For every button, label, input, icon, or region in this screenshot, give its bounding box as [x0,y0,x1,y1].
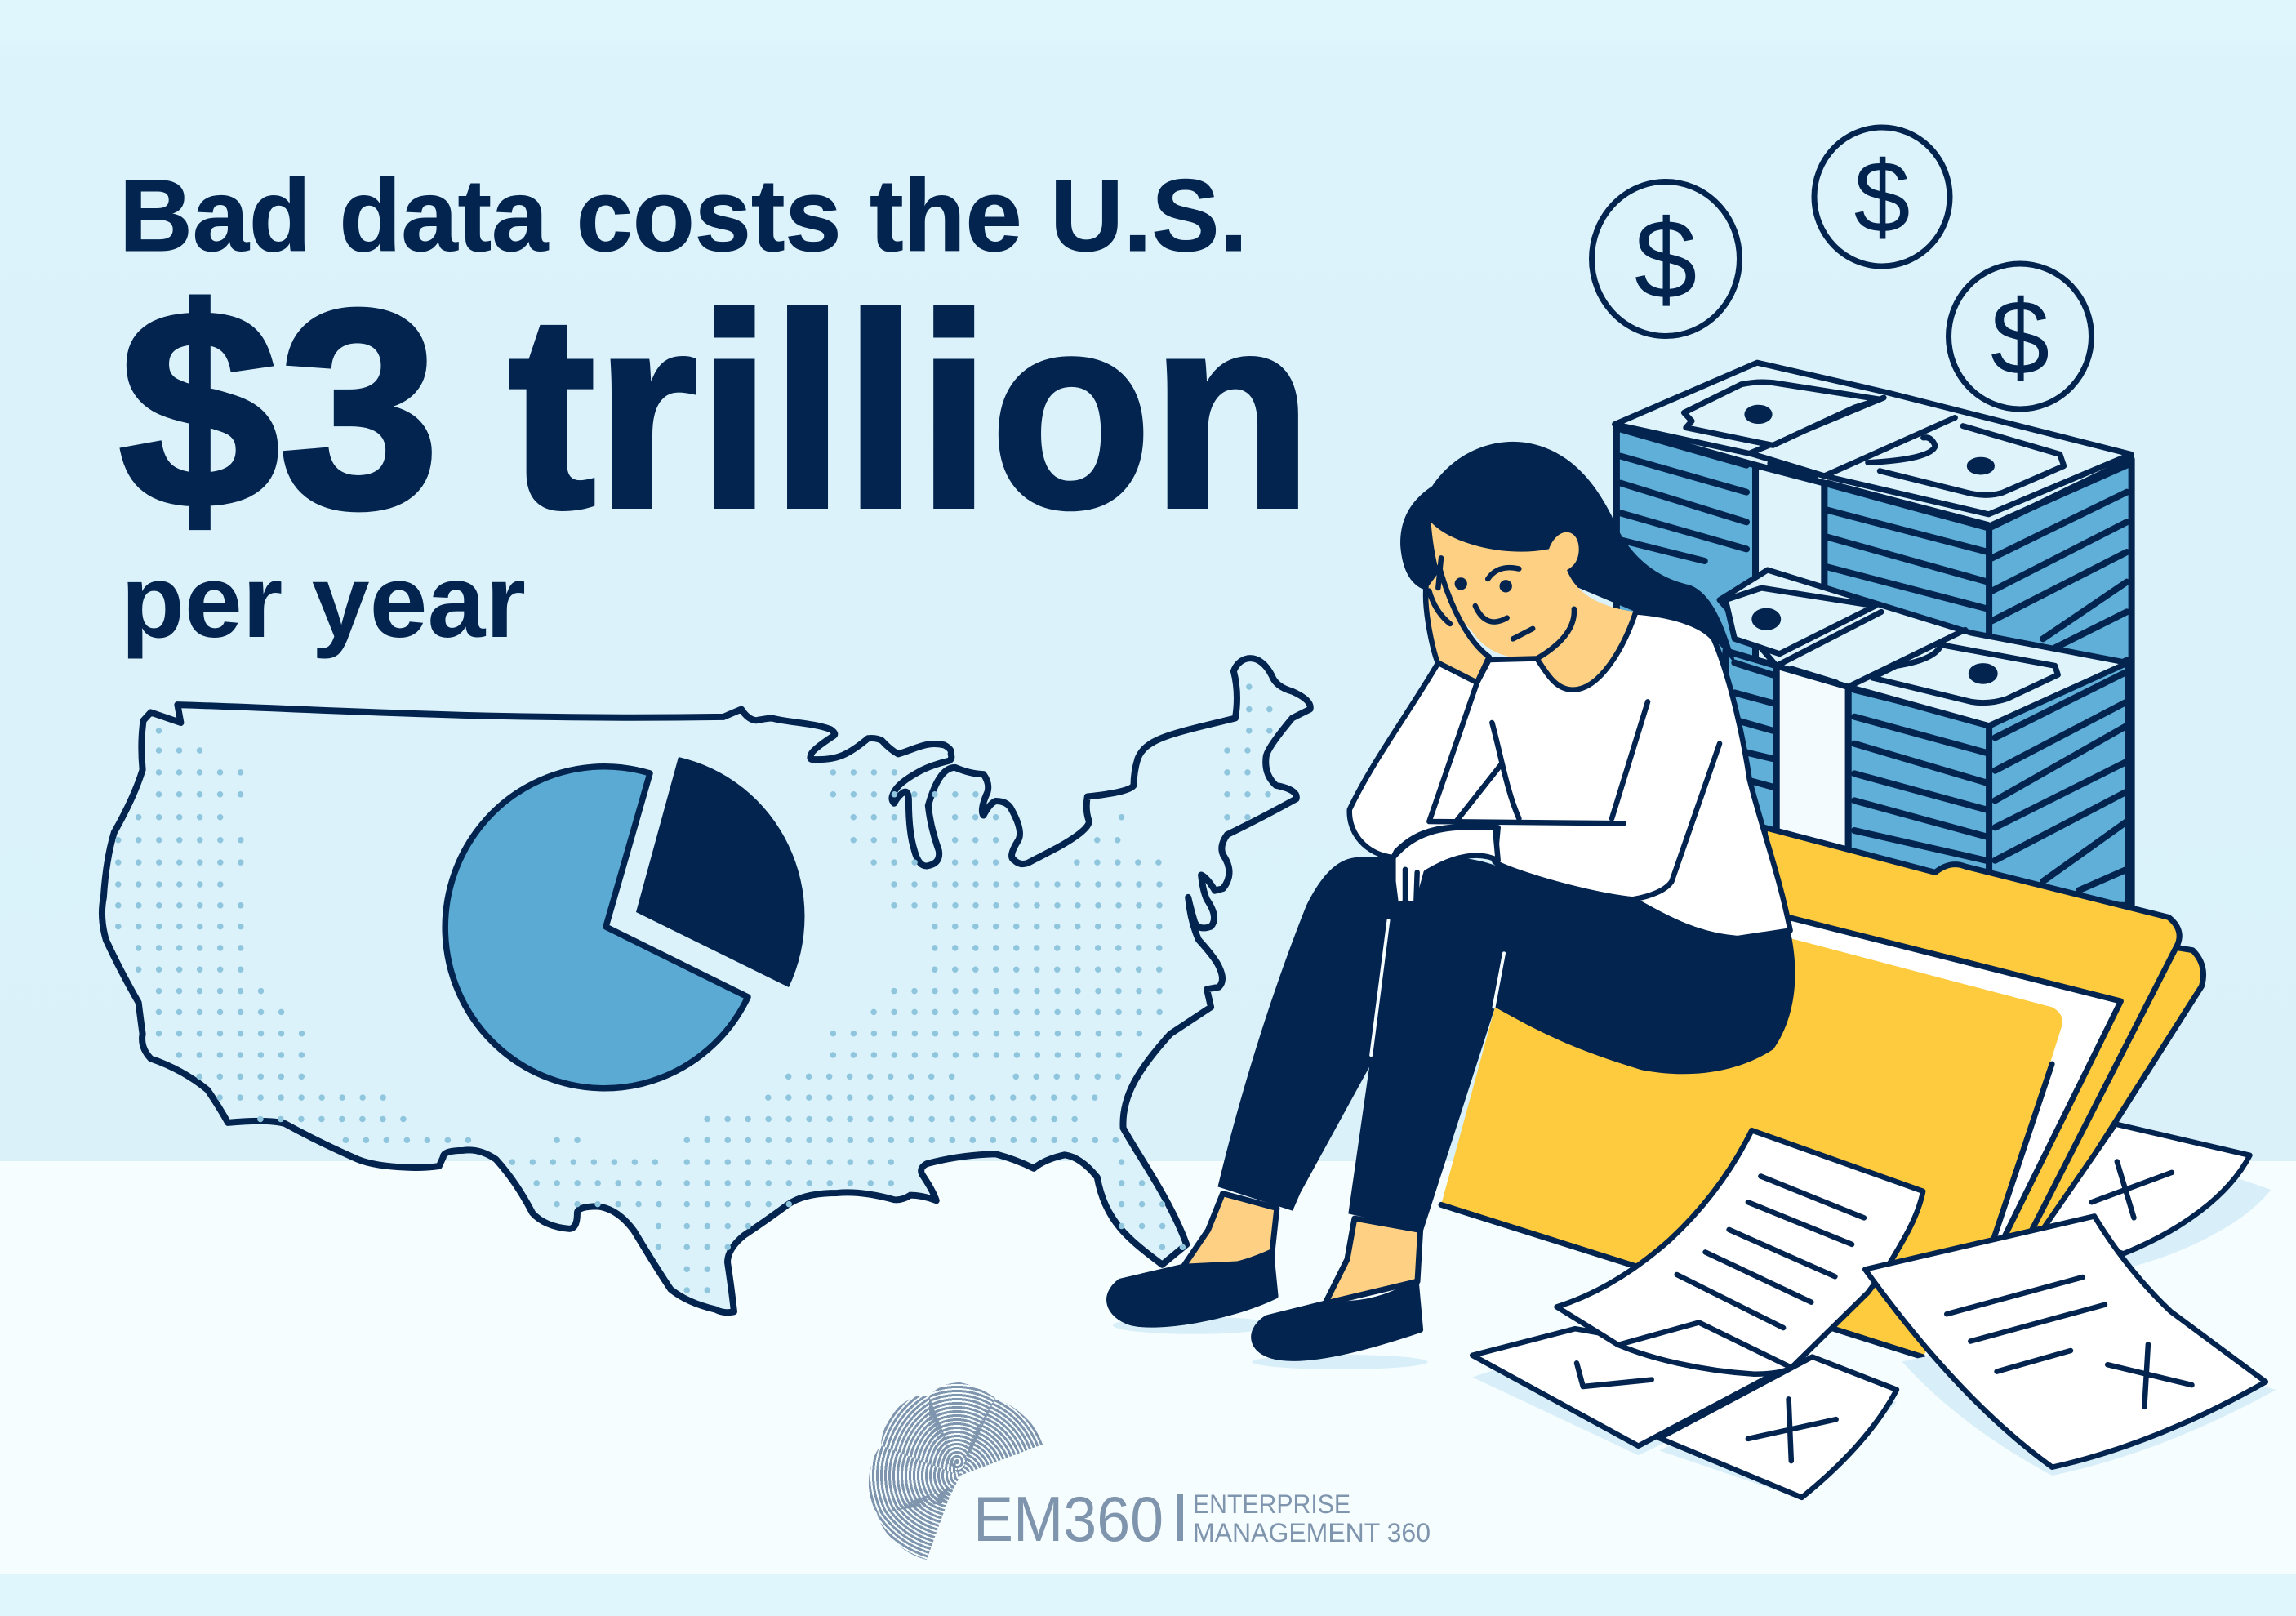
paper shadows [1472,1137,2276,1499]
shirt [1350,612,1791,938]
pie slice: dark blue share [636,757,804,987]
yellow folder [1441,827,2204,1357]
paper with X, back right [2045,1124,2249,1253]
trouser highlights [1371,920,1504,1055]
trousers [1217,856,1795,1231]
pie chart [445,757,804,1088]
coin 2: $ [1854,141,1910,254]
large paper with text lines and X [1865,1216,2266,1467]
folder edges [1441,1064,2052,1357]
mouth [1513,629,1533,639]
upper stack side faces [1617,426,1755,719]
logo wordmark [973,1483,1431,1555]
lower stack side faces [1725,651,1777,839]
background wall [0,0,2296,1161]
headline figure: trillion: trillion [508,259,1312,565]
title [119,159,1312,659]
lower cash stack [1720,570,2128,906]
EM360: EM360 [973,1483,1164,1555]
document inside folder [1786,917,2120,1244]
coin 1 [1592,181,1739,336]
dollar coins [1592,127,2092,409]
coin 3 [1948,264,2092,409]
hand on cheek [1426,567,1489,683]
face details [1429,558,1574,659]
EM360 logo [869,1382,1431,1560]
scattered papers [1472,1124,2276,1499]
bottom band [0,1574,2296,1616]
shoe shadows [1113,1316,1274,1334]
coin 3: $ [1991,278,2049,397]
lower stack top surface [1720,570,2128,726]
logo emblem [869,1382,1044,1560]
jaw line [1537,609,1574,659]
divider bar [1177,1494,1183,1541]
nose [1475,606,1507,622]
folder front panel [1441,938,2062,1357]
right shoe [1254,1281,1421,1358]
hand on knee [1393,827,1498,906]
shirt fold lines [1429,683,1720,899]
headline figure: $3: $3 [119,252,439,567]
folder back panel [1764,827,2179,1247]
halftone dots [118,687,1270,1290]
feet and shoes [1110,1194,1428,1369]
map of the United States [102,658,1310,1312]
pie slice: light blue majority [445,767,748,1088]
figure body [1217,442,1795,1231]
background floor [0,1161,2296,1574]
coin 2 [1814,127,1950,266]
curled paper with text lines [1557,1130,1923,1374]
stacks of cash [1615,363,2132,906]
subheading: per year: per year [121,543,526,659]
left shoe [1110,1252,1275,1324]
upper stack top surface [1615,363,2131,514]
finger lines [1429,558,1450,624]
hand lines [1405,870,1417,906]
hair [1400,442,1737,666]
woman sitting [1110,442,1795,1369]
face and neck [1431,522,1635,690]
upper cash stack [1617,426,2132,906]
heading: Bad data costs the U.S.: Bad data costs the U.S. [119,159,1248,273]
eyes [1457,580,1465,587]
eyebrow [1488,568,1519,579]
folder rear sheet [2001,947,2204,1247]
coin 1: $ [1635,197,1697,323]
band dash [1770,463,1815,475]
paper with tick [1472,1329,1789,1446]
MANAGEMENT 360: MANAGEMENT 360 [1193,1518,1431,1547]
ankles [1183,1194,1421,1303]
ENTERPRISE: ENTERPRISE [1193,1489,1350,1519]
map outline [102,658,1310,1312]
paper with X, lower [1659,1357,1897,1498]
